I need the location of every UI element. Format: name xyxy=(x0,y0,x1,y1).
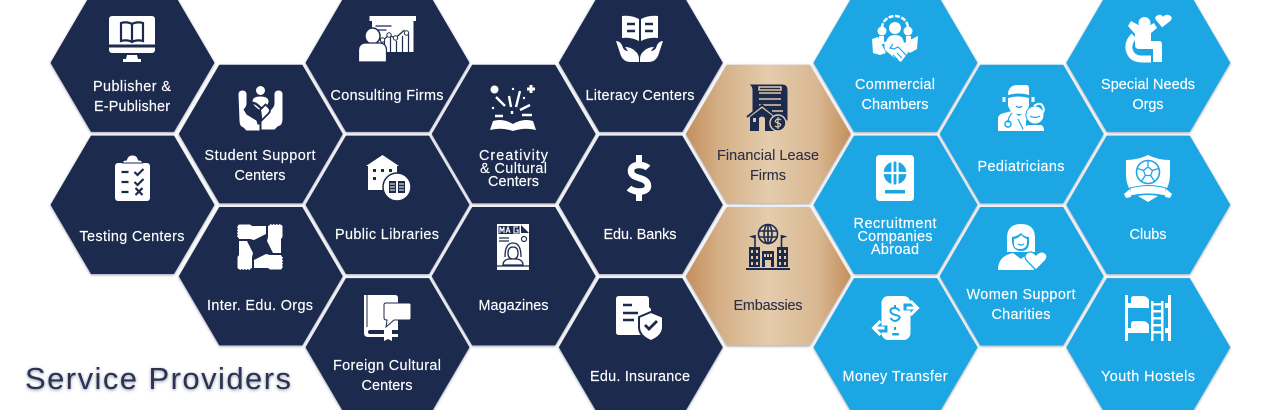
label: Student Support xyxy=(204,148,316,164)
icon: document with shield xyxy=(616,296,663,341)
label xyxy=(333,358,441,394)
hexagon xyxy=(686,65,851,203)
label: Firms xyxy=(750,168,786,184)
tile: Edu. Banks xyxy=(559,136,723,274)
tile: Foreign Cultural Centers xyxy=(306,278,470,410)
label: Edu. Banks xyxy=(604,227,676,243)
hexagon xyxy=(306,136,470,274)
label: Testing Centers xyxy=(80,229,184,245)
tile: Pediatricians xyxy=(940,65,1104,203)
label: Edu. Insurance xyxy=(590,369,690,385)
tile: Women Support Charities xyxy=(940,207,1104,345)
hexagon xyxy=(432,207,596,345)
tile: Embassies xyxy=(686,207,851,345)
hexagon xyxy=(50,0,214,132)
label: Embassies xyxy=(734,298,802,314)
hexagon xyxy=(559,0,723,132)
icon: hands holding book xyxy=(616,16,663,62)
tile: Edu. Insurance xyxy=(559,278,723,410)
hexagon xyxy=(940,65,1104,203)
icon: football club badge xyxy=(1124,155,1172,202)
label: Magazines xyxy=(478,298,548,314)
icon: handshake with team xyxy=(872,16,918,62)
label: Clubs xyxy=(1130,227,1166,243)
label: Chambers xyxy=(862,97,928,113)
hexagon xyxy=(814,278,978,410)
icon: presenter with chart xyxy=(358,16,416,62)
hexagon xyxy=(1066,136,1230,274)
label: Inter. Edu. Orgs xyxy=(207,298,313,314)
label: Public Libraries xyxy=(335,227,439,243)
hexagon xyxy=(306,0,470,132)
icon: magazine cover xyxy=(497,224,529,270)
label xyxy=(966,287,1076,323)
label: Charities xyxy=(992,307,1050,323)
label: Consulting Firms xyxy=(330,88,444,104)
hexagon xyxy=(814,0,978,132)
icon: computer with book xyxy=(109,16,155,62)
tile: Testing Centers xyxy=(50,136,214,274)
icon: woman with heart xyxy=(998,224,1047,270)
label: E-Publisher xyxy=(94,99,170,115)
tile: Clubs xyxy=(1066,136,1230,274)
tile: Creativity & Cultural Centers xyxy=(432,65,596,203)
icon: library building xyxy=(366,155,411,201)
tile: Consulting Firms xyxy=(306,0,470,132)
icon: wheelchair child with heart xyxy=(1128,14,1172,62)
icon: embassy building with globe xyxy=(746,224,790,270)
label xyxy=(204,148,316,184)
hexagon xyxy=(179,207,343,345)
label xyxy=(93,79,171,115)
label: Pediatricians xyxy=(978,159,1064,175)
panel: gold service providers xyxy=(686,65,851,345)
tile: Publisher & E-Publisher xyxy=(50,0,214,132)
hexagon xyxy=(1066,278,1230,410)
hexagon xyxy=(814,136,978,274)
icon: bunk bed and ladder xyxy=(1125,295,1171,341)
label xyxy=(717,148,819,184)
label: Special Needs xyxy=(1101,77,1195,93)
label: Companies xyxy=(858,229,932,245)
icon: phone money transfer xyxy=(874,296,918,340)
hexagon xyxy=(940,207,1104,345)
label: Financial Lease xyxy=(717,148,819,164)
label: Centers xyxy=(488,174,539,190)
label: Money Transfer xyxy=(842,369,948,385)
tile: Commercial Chambers xyxy=(814,0,978,132)
icon: open book with sparks xyxy=(490,85,536,131)
tile: Youth Hostels xyxy=(1066,278,1230,410)
panel: navy service providers xyxy=(50,0,723,410)
label: Recruitment xyxy=(854,216,936,232)
label: Commercial xyxy=(855,77,935,93)
label xyxy=(855,77,935,113)
hexagon xyxy=(559,136,723,274)
label: Creativity xyxy=(479,148,549,164)
hexagon xyxy=(306,278,470,410)
label xyxy=(1101,77,1195,113)
label: Centers xyxy=(234,168,286,184)
hexagon xyxy=(559,278,723,410)
icon: hands holding person xyxy=(238,86,282,130)
icon: doctor with baby xyxy=(998,85,1044,131)
tile: Literacy Centers xyxy=(559,0,723,132)
label: Women Support xyxy=(966,287,1076,303)
icon: four linked hands xyxy=(237,224,283,270)
tile: Magazines xyxy=(432,207,596,345)
icon: dollar sign xyxy=(629,155,648,201)
icon: clipboard xyxy=(115,155,150,201)
icon: house lease document xyxy=(747,85,787,131)
icon: book with speech bubble xyxy=(364,295,411,341)
label: Centers xyxy=(362,378,412,394)
label: & Cultural xyxy=(480,161,547,177)
tile: Public Libraries xyxy=(306,136,470,274)
label xyxy=(479,148,549,190)
label xyxy=(854,216,936,258)
hexagon xyxy=(1066,0,1230,132)
panel: blue service providers xyxy=(814,0,1230,410)
tile: Financial Lease Firms xyxy=(686,65,851,203)
label: Youth Hostels xyxy=(1101,369,1195,385)
hexagon xyxy=(432,65,596,203)
hexagon xyxy=(50,136,214,274)
tile: Recruitment Companies Abroad xyxy=(814,136,978,274)
tile: Special Needs Orgs xyxy=(1066,0,1230,132)
tile: Money Transfer xyxy=(814,278,978,410)
label: Publisher & xyxy=(93,79,171,95)
label: Literacy Centers xyxy=(586,88,694,104)
hexagon xyxy=(179,65,343,203)
label: Foreign Cultural xyxy=(333,358,441,374)
label: Abroad xyxy=(871,242,919,258)
icon: passport xyxy=(876,155,914,201)
title: Service Providers xyxy=(25,361,291,396)
label: Orgs xyxy=(1132,97,1164,113)
tile: Student Support Centers xyxy=(179,65,343,203)
tile: Inter. Edu. Orgs xyxy=(179,207,343,345)
hexagon xyxy=(686,207,851,345)
